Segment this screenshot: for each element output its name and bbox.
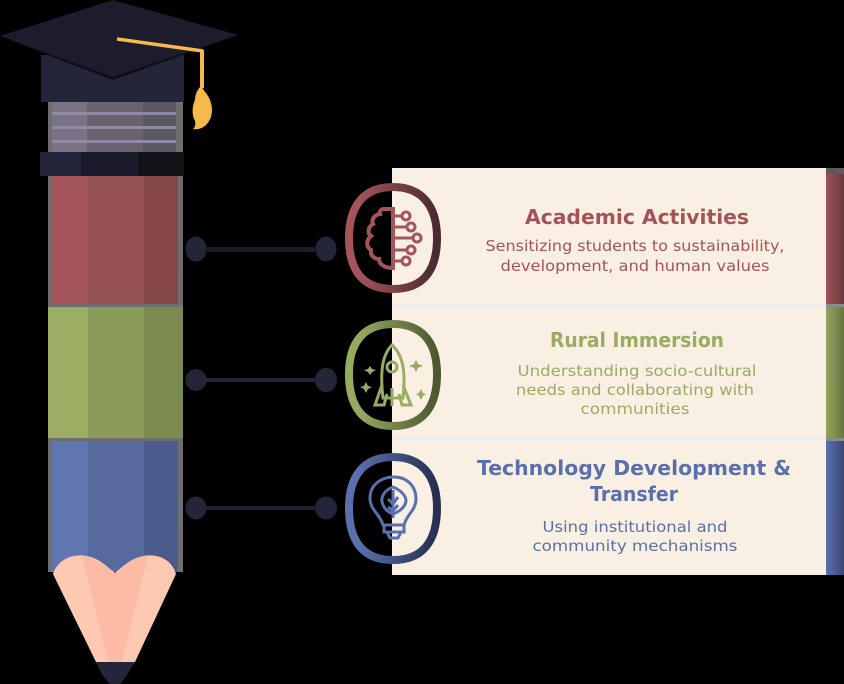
red pencil segment xyxy=(52,175,178,304)
red side tab xyxy=(826,174,844,304)
icon: brain circuit xyxy=(349,187,437,289)
panel: rural immersion xyxy=(392,307,844,438)
pencil eraser ferrule xyxy=(52,102,176,152)
ring xyxy=(349,324,437,426)
rocket body xyxy=(375,345,411,406)
description: Sensitizing students to sustainability, xyxy=(486,237,784,255)
icon: rocket xyxy=(349,324,437,426)
bulb xyxy=(370,477,416,538)
panel: academic activities xyxy=(392,168,844,304)
description: development, and human values xyxy=(500,257,770,275)
connector: green xyxy=(186,368,337,392)
icon: light bulb xyxy=(349,457,437,560)
ring xyxy=(349,187,437,289)
blue pencil segment xyxy=(52,441,178,572)
connector: red xyxy=(186,236,336,262)
pencil lead xyxy=(96,662,135,684)
green side tab xyxy=(826,307,844,438)
graduation cap base xyxy=(41,55,184,102)
description: Understanding socio-cultural xyxy=(518,362,756,380)
heading: Technology Development & xyxy=(477,456,791,480)
description: Using institutional and xyxy=(542,518,728,536)
tassel xyxy=(117,39,212,129)
heading: Rural Immersion xyxy=(550,328,724,352)
heading: Academic Activities xyxy=(525,205,749,229)
pencil edge shading xyxy=(48,102,183,572)
ring xyxy=(349,457,437,560)
stars xyxy=(360,360,426,400)
pencil collar band xyxy=(40,152,184,176)
connector: blue xyxy=(186,496,337,520)
green pencil segment xyxy=(48,307,183,438)
panel: technology development xyxy=(392,441,844,575)
description: community mechanisms xyxy=(532,537,738,555)
brain xyxy=(367,209,393,268)
description: communities xyxy=(580,400,690,418)
description: needs and collaborating with xyxy=(516,381,754,399)
pencil illustration xyxy=(0,0,238,684)
graduation cap board xyxy=(0,0,238,80)
blue side tab xyxy=(826,441,844,575)
panel gap strips xyxy=(392,304,844,441)
heading: Transfer xyxy=(590,482,678,506)
pencil wood tip xyxy=(53,555,176,662)
